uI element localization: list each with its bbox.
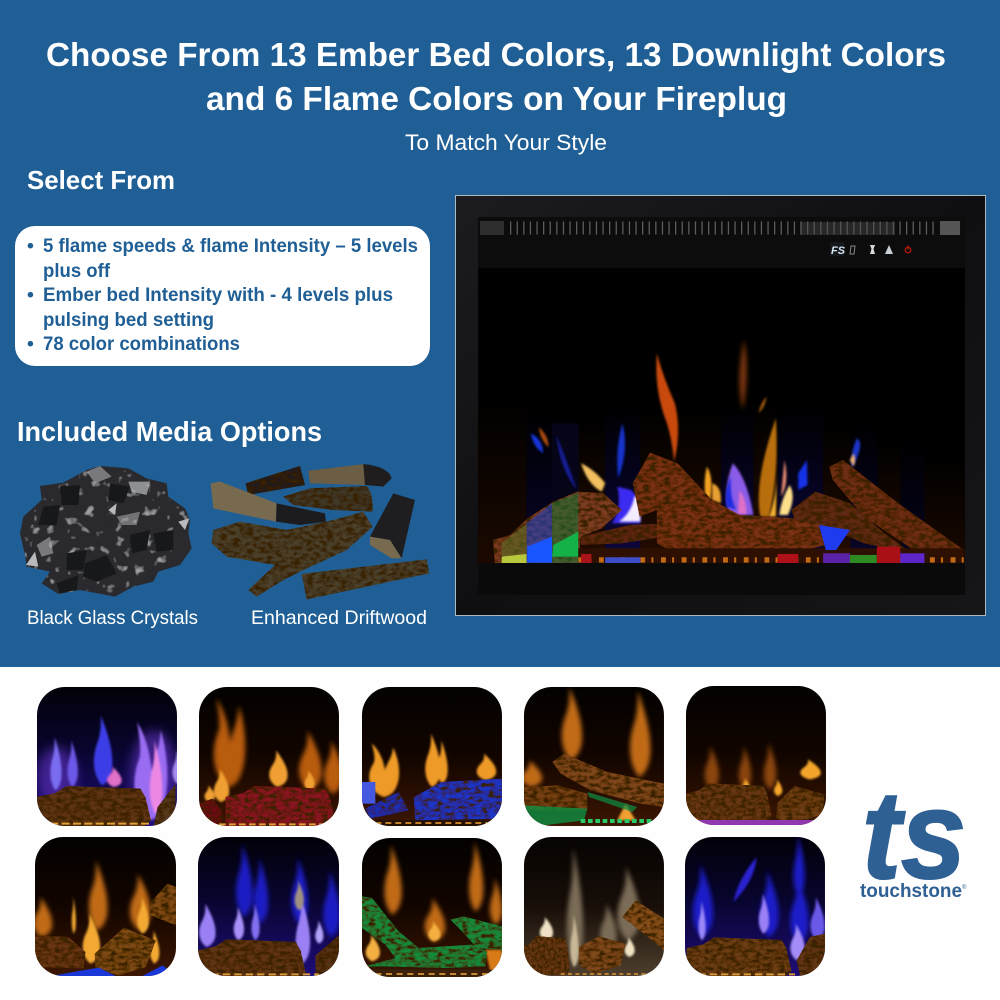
thumbnail: white flames, natural embers [524,837,664,976]
firebox [478,268,965,563]
title: Choose From 13 Ember Bed Colors, 13 Downlight Colors [46,36,946,73]
caption: enhanced driftwood: Enhanced Driftwood [251,607,427,629]
log: flat tan [211,482,326,525]
feature bullets [27,235,418,355]
subtitle: To Match Your Style [405,130,607,155]
color overlay strips on left pile [502,493,578,563]
thumbnail: purple flames, natural embers [37,687,183,827]
log: top left [246,466,305,495]
feature bullets: • [27,333,34,355]
logo: touchstone: ts [862,766,966,905]
thumbnail: blue-violet flames, natural embers [198,837,340,980]
title: and 6 Flame Colors on Your Fireplug [206,80,787,117]
log: left pile [493,492,622,563]
log: right chunk [370,493,415,558]
feature bullets: • [27,235,34,257]
feature bullets: 78 color combinations [43,333,240,355]
log: far right [829,460,964,563]
control icons: FS [831,245,846,257]
frame [456,196,986,616]
log: top right [308,464,392,487]
control icons [830,242,911,257]
blue upper background [0,0,1000,667]
log: large branch [212,512,373,597]
white lower background [0,667,1000,1000]
feature bullets: Ember bed Intensity with - 4 levels plus [43,284,393,306]
log: lower [302,559,429,599]
feature bullets: • [27,284,34,306]
flame color strips [478,397,965,563]
panel: fireplace insert [456,196,986,616]
log: center branch [633,453,829,563]
heading: included media options: Included Media Options [17,416,322,447]
thumbnail: amber flames, violet embers [686,686,826,825]
thumbnail: amber flames, blue embers [362,687,502,826]
icon: enhanced driftwood logs [211,464,429,599]
thumbnail: amber flames, blue ember bed [34,837,176,976]
icon: black glass crystals [20,466,192,597]
thumbnail: amber flames, green logs [362,838,502,977]
heading: select from: Select From [27,165,175,195]
panel: feature list [15,226,430,366]
log: right front [791,492,912,553]
logo: touchstone: touchstone [860,881,962,902]
vent slots [480,221,960,235]
feature bullets: pulsing bed setting [43,309,214,331]
logo: touchstone: ® [962,884,967,891]
thumbnail: deep blue flames, natural embers [685,834,825,978]
feature bullets: 5 flame speeds & flame Intensity – 5 levels [43,235,418,257]
thumbnail: amber flames, green embers [522,687,664,826]
log: rear center [581,523,674,545]
thumbnail: amber flames, red embers [199,687,343,827]
log: middle [283,486,373,512]
flames [531,340,860,523]
title [46,36,946,117]
feature bullets: plus off [43,260,110,282]
ember bed [578,525,964,563]
caption: black glass crystals: Black Glass Crystals [27,607,198,629]
